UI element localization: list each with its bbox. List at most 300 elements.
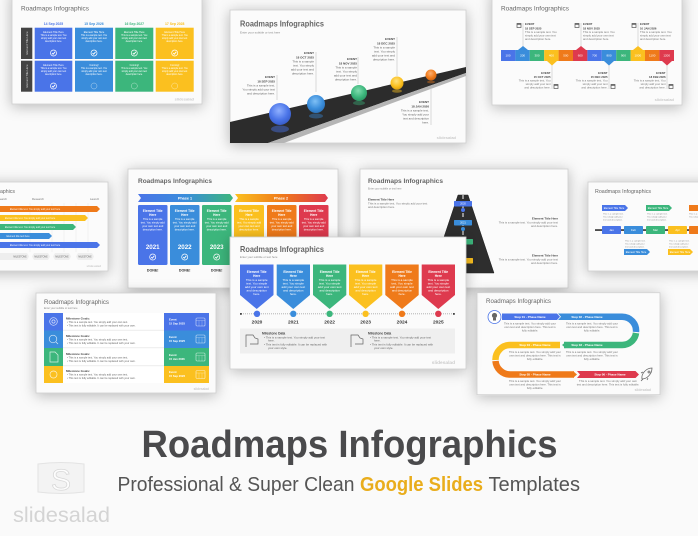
done labels: DONE!: [147, 268, 158, 272]
event labels: 18 SEP 2025: [257, 80, 275, 84]
phase cards: Element Title: [175, 209, 195, 213]
milestone data panel: • This is a sample text. You simply add your text: [370, 336, 431, 340]
event labels: 15 DEC 2025: [591, 75, 608, 79]
phase cards: text. You simply add: [205, 220, 229, 224]
event labels: description here.: [373, 58, 395, 62]
event labels: [242, 37, 429, 124]
date column: Event: [169, 370, 177, 374]
pentagon cards: Here: [290, 274, 297, 278]
milestone text: • This text is fully editable. It can be replaced with your own.: [67, 341, 136, 345]
phase arrows: Phase 1: [178, 196, 192, 200]
event labels: This is a sample: [292, 60, 314, 64]
panel: center-left slide, phase cards: [128, 169, 338, 288]
descriptions: You simply add your: [603, 216, 623, 218]
segmented bar: 800: [606, 54, 612, 58]
subtitle: Professional & Super Clean: [118, 474, 354, 496]
pentagon cards: Here: [253, 274, 260, 278]
phase cards: Here: [310, 213, 317, 217]
footer brand: slidesalad: [437, 135, 457, 140]
milestone chips: MILESTONE: [13, 256, 27, 258]
event labels: EVENT: [541, 71, 551, 75]
card grid: description here.: [45, 73, 62, 76]
date column: Event: [169, 318, 177, 322]
phase cards: This is a sample: [239, 217, 259, 221]
step descriptions: This is a sample text. You simply add your: [509, 350, 561, 354]
pentagon cards: text. You simple: [283, 282, 304, 286]
panel: lower-right slide, winding road steps: [477, 293, 660, 395]
year labels: 2024: [397, 320, 408, 326]
pentagon cards: This is a sample: [427, 278, 449, 282]
pentagon cards: text. You simple: [246, 282, 268, 286]
gantt arrows: Element title text. You simply add your text here: [10, 244, 61, 247]
card grid: simply add your own text: [122, 70, 147, 73]
step descriptions: own text and description here. This text is: [509, 354, 561, 358]
step descriptions: This is a sample text. You simply add your: [566, 350, 618, 354]
phase cards: text. You simply add: [302, 220, 326, 224]
event labels: This is a sample text. You: [634, 78, 666, 82]
event labels: This is a sample text. You: [583, 30, 615, 34]
step descriptions: fully editable.: [522, 328, 538, 332]
descriptions: You simply add your: [669, 242, 689, 246]
event labels: EVENT: [347, 57, 357, 61]
element text blocks: and description here.: [368, 205, 395, 209]
step labels: [514, 315, 626, 376]
pentagon cards: add your own text: [390, 285, 414, 289]
milestone data panel: • This is a sample text. You simply add your text: [264, 336, 325, 340]
card grid: simply add your own text: [162, 70, 188, 73]
step labels: Step 01 - Phase Name: [514, 315, 546, 319]
pentagon cards: Element Title: [392, 270, 412, 274]
step descriptions: fully editable.: [584, 357, 600, 361]
gantt arrows: Element title text. You simply add your text here: [5, 226, 56, 229]
event labels: EVENT: [304, 51, 314, 55]
event labels: text. You simply: [374, 50, 395, 54]
slide heading: Roadmaps Infographics: [240, 245, 324, 254]
done labels: DONE!: [179, 268, 190, 272]
phase cards: [138, 205, 328, 265]
phase cards: description here.: [239, 228, 259, 232]
card grid: simply add your own text: [41, 70, 66, 73]
card grid: Coming!: [170, 64, 180, 67]
panel: lower-left slide, milestone table: Enter your subtitle or text here: [44, 307, 78, 310]
step descriptions: text and description here. This text is fully editable.: [577, 382, 640, 386]
pentagon cards: Element Title: [247, 270, 267, 274]
pentagon cards: text. You simple: [391, 282, 413, 286]
row labels: Element Title Here: [25, 64, 29, 88]
start icon: [488, 310, 501, 324]
event labels: EVENT: [385, 37, 395, 41]
phase cards: Element Title: [239, 209, 259, 213]
pentagon cards: here.: [253, 292, 260, 296]
slide heading: Roadmaps Infographics: [21, 6, 90, 12]
subtitle: Google Slides: [360, 474, 483, 496]
descriptions: This is a sample text.: [625, 240, 646, 242]
panel: center-right slide, perspective road: [360, 169, 568, 288]
date column: 15 Sep 2025: [169, 339, 185, 343]
card grid: Element Title Here: [84, 31, 105, 34]
card grid: Element Title Here: [164, 31, 186, 34]
phase cards: text. You simply add: [270, 220, 294, 224]
milestone data panel: Milestone Data: [262, 332, 285, 336]
event labels: You simply add your: [402, 112, 429, 116]
gantt arrows: Element title text. You simply add your text here: [5, 217, 56, 220]
date headers: [44, 22, 185, 26]
pentagon cards: Element Title: [283, 270, 303, 274]
step descriptions: fully editable.: [527, 357, 543, 361]
pentagon cards: and description: [355, 288, 376, 292]
panel: center front slide, pentagon timeline: [230, 237, 466, 369]
step labels: Step 05 - Phase Name: [519, 372, 551, 376]
pentagon cards: add your own text: [281, 285, 305, 289]
event labels: [519, 22, 672, 90]
phase cards: your own text and: [303, 224, 325, 228]
event labels: description here.: [335, 78, 357, 82]
pentagon cards: here.: [326, 292, 333, 296]
milestone chips: MILESTONE: [78, 256, 92, 258]
event labels: This is a sample text.: [247, 84, 275, 88]
pennant labels: Element Title Here: [648, 207, 669, 210]
event labels: and description here.: [525, 37, 551, 41]
pentagon cards: and description: [247, 288, 267, 292]
step descriptions: own text and description here. This text is: [509, 382, 561, 386]
phase cards: Here: [278, 213, 285, 217]
date column: 15 Sep 2025: [169, 322, 185, 326]
event labels: This is a sample text. You: [640, 30, 672, 34]
card grid: This is a sample text. You: [81, 34, 108, 37]
phase arrows: [138, 194, 328, 202]
milestone headers: Research: [32, 197, 44, 201]
phase cards: Element Title: [304, 209, 324, 213]
segmented bar: 900: [621, 54, 626, 58]
milestone data panel: here.: [268, 338, 275, 342]
done labels: DONE!: [211, 268, 222, 272]
phase cards: description here.: [272, 228, 292, 232]
pentagon cards: This is a sample: [391, 278, 413, 282]
pentagon cards: Here: [435, 274, 442, 278]
descriptions: You simply add your: [647, 216, 667, 218]
card grid: description here.: [45, 40, 62, 43]
step labels: Step 02 - Phase Name: [571, 315, 603, 319]
event labels: and description here.: [639, 86, 666, 90]
logo: slidesalad: slidesalad: [13, 504, 110, 527]
date headers: 15 Sep 2026: [84, 22, 104, 26]
logo: slidesalad: [13, 462, 110, 527]
phase cards: Element Title: [143, 209, 163, 213]
event labels: EVENT: [525, 22, 535, 26]
event labels: 10 JAN 2026: [640, 26, 657, 30]
footer brand: slidesalad: [86, 264, 101, 268]
slide heading: Roadmaps Infographics: [44, 300, 109, 306]
subtitle: [118, 474, 580, 496]
panel: top-left slide, quarterly card grid: [12, 0, 202, 104]
event labels: This is a sample text. You: [519, 78, 551, 82]
done labels: [147, 268, 222, 272]
event labels: EVENT: [656, 71, 666, 75]
event labels: This is a sample text. You: [525, 30, 557, 34]
year labels: 2021: [288, 320, 299, 326]
step descriptions: This is a sample text. You simply add your: [566, 322, 618, 326]
phase cards: 2021: [146, 244, 160, 251]
footer brand: slidesalad: [432, 360, 455, 366]
event labels: and description here.: [247, 92, 275, 96]
phase cards: description here.: [304, 228, 324, 232]
event labels: EVENT: [583, 22, 593, 26]
card grid: Element Title Here: [43, 31, 64, 34]
icon column: [44, 313, 63, 383]
month boxes: Apr: [675, 228, 680, 232]
card grid: This is a sample text. You: [121, 34, 148, 37]
pentagon cards: add your own text: [426, 285, 450, 289]
card grid: simply add your own text: [81, 37, 107, 40]
milestone text: • This is a sample text. You simply add your own text.: [67, 338, 128, 342]
event labels: and description here.: [581, 86, 608, 90]
phase cards: This is a sample: [304, 217, 324, 221]
segmented bar: 600: [578, 54, 583, 58]
descriptions: You simply add your: [625, 242, 645, 246]
event labels: 18 FEB 2026: [649, 75, 666, 79]
slide heading: Roadmaps Infographics: [138, 178, 212, 185]
card grid: simply add your own text: [41, 37, 66, 40]
phase cards: your own text and: [271, 224, 293, 228]
card grid: This is a sample text. You: [81, 67, 108, 70]
pennant labels: Element Title Here: [604, 207, 625, 210]
phase cards: your own text and: [174, 224, 196, 228]
phase cards: 2022: [178, 244, 192, 251]
logo: slidesalad: S: [51, 464, 71, 497]
card grid: description here.: [86, 40, 103, 43]
pentagon cards: add your own text: [354, 285, 378, 289]
descriptions: text and description.: [603, 218, 623, 222]
phase cards: your own text and: [206, 224, 228, 228]
step descriptions: This is a sample text. You simply add your: [509, 379, 561, 383]
phase cards: Here: [245, 213, 253, 217]
pentagon cards: text. You simple: [319, 282, 340, 286]
event labels: This is a sample: [335, 66, 357, 70]
slide heading: Roadmaps Infographics: [486, 299, 551, 305]
step labels: Step 04 - Phase Name: [519, 343, 551, 347]
slide heading: Roadmaps Infographics: [240, 20, 324, 28]
event labels: 18 SEP 2025: [525, 26, 542, 30]
milestone data panel: your own style.: [374, 346, 393, 350]
pentagon cards: and description: [283, 288, 304, 292]
markers and leaders: [517, 23, 673, 89]
pentagon cards: and description: [428, 288, 449, 292]
main title: Roadmaps Infographics: [142, 424, 558, 466]
pentagon cards: This is a sample: [355, 278, 377, 282]
milestone text: • This is a sample text. You simply add your own text.: [67, 372, 128, 376]
event labels: add your text and: [291, 68, 314, 72]
pentagon cards: here.: [399, 292, 406, 296]
step descriptions: fully editable.: [584, 328, 600, 332]
milestone text: [66, 316, 136, 380]
card grid: description here.: [166, 73, 184, 76]
timeline line: [595, 229, 698, 231]
card grid: description here.: [126, 40, 143, 43]
event labels: add your text and: [372, 54, 395, 58]
pentagon cards: here.: [290, 292, 297, 296]
phase cards: text. You simply add: [141, 220, 165, 224]
pentagon cards: This is a sample: [319, 278, 341, 282]
card grid: This is a sample text. You: [162, 34, 188, 37]
pentagon cards: here.: [362, 292, 369, 296]
icon: rocket: [641, 368, 652, 381]
date column: [164, 313, 209, 383]
phase cards: description here.: [207, 228, 227, 232]
date column: 15 Jan 2026: [169, 357, 185, 361]
segmented bar: 700: [592, 54, 597, 58]
milestone data panel: Milestone Data: [368, 332, 391, 336]
event labels: simply add your own text: [583, 34, 614, 38]
step descriptions: own text and description here. This text is: [504, 325, 556, 329]
slide heading: Roadmaps Infographics: [368, 178, 443, 185]
winding arrows: [495, 314, 639, 378]
event labels: simply add your text: [583, 82, 608, 86]
milestone text: • This text is fully editable. It can be replaced with your own.: [67, 359, 136, 363]
segmented bar: 1100: [649, 54, 656, 58]
month boxes: Feb: [631, 228, 636, 232]
footer brand: slidesalad: [175, 96, 195, 102]
road: 2021: [460, 221, 466, 225]
phase cards: This is a sample: [175, 217, 195, 221]
event labels: 15 OCT 2025: [534, 75, 551, 79]
card grid: simply add your own text: [81, 70, 107, 73]
phase cards: Element Title: [207, 209, 227, 213]
subtitle: Templates: [488, 474, 580, 496]
pentagon cards: This is a sample: [282, 278, 304, 282]
pentagon cards: Element Title: [320, 270, 340, 274]
slide heading: Roadmaps Infographics: [501, 6, 570, 12]
panel: top-right slide, colored year bar timeline: [492, 0, 682, 105]
card grid: simply add your own text: [122, 37, 147, 40]
road: [230, 67, 466, 143]
element text blocks: Element Title Here: [532, 254, 558, 258]
segmented bar: 100: [505, 54, 511, 58]
row labels: [21, 28, 32, 92]
milestone data panel: here.: [374, 338, 381, 342]
event leader lines: [277, 37, 431, 125]
date column: 15 Sep 2026: [169, 374, 185, 378]
event labels: simply add your own text: [525, 34, 556, 38]
milestone text: Milestone Goals:: [66, 352, 90, 356]
card grid: Coming!: [89, 64, 99, 67]
timeline: [240, 311, 455, 317]
event labels: and description here.: [583, 37, 609, 41]
phase cards: text. You simply add: [173, 220, 197, 224]
event labels: simply add your text: [526, 82, 551, 86]
date column: Event: [169, 353, 177, 357]
pentagon cards: and description: [319, 288, 340, 292]
pentagon cards: Here: [326, 274, 333, 278]
footer brand: slidesalad: [194, 387, 209, 391]
element text blocks: Element Title Here: [532, 216, 558, 220]
road: 2020: [460, 202, 466, 206]
road: [432, 195, 494, 273]
gantt arrows: [0, 206, 100, 248]
row labels: Element Title Here: [25, 31, 29, 55]
milestone data panel: • This text is fully editable. It can be replaced with: [264, 342, 327, 346]
event labels: EVENT: [598, 71, 608, 75]
event labels: and description here.: [640, 37, 666, 41]
date headers: 16 Sep 2027: [125, 22, 144, 26]
descriptions: text and description.: [647, 218, 667, 222]
card grid: [35, 28, 194, 92]
element text blocks: This is a sample text. You simply add your text: [368, 202, 427, 206]
milestone headers: [0, 197, 100, 201]
panel: lower-left slide, milestone table: [36, 293, 216, 393]
event labels: simply add your text: [641, 82, 666, 86]
panel: left slide, gantt arrows: [0, 182, 108, 271]
event labels: 18 DEC 2025: [377, 42, 395, 46]
event labels: 18 JAN 2026: [411, 104, 429, 108]
pennant labels: [602, 205, 698, 255]
milestone chips: [0, 253, 94, 260]
pentagon cards: Element Title: [428, 270, 448, 274]
card grid: Element Title Here: [43, 64, 64, 67]
milestone text: Milestone Goals:: [66, 369, 90, 373]
event labels: text. You simply: [293, 64, 314, 68]
phase cards: text. You simply add: [237, 220, 261, 224]
segmented bar: 500: [563, 54, 569, 58]
event labels: This is a sample text.: [401, 108, 429, 112]
milestone chips: MILESTONE: [55, 256, 69, 258]
card grid: description here.: [126, 73, 143, 76]
pentagon cards: and description: [392, 288, 412, 292]
milestone text: Milestone Goals:: [66, 334, 90, 338]
element text blocks: and description here.: [531, 224, 558, 228]
year labels: 2020: [252, 320, 263, 326]
pentagon cards: Here: [362, 274, 369, 278]
pennant labels: Element Title Here: [626, 251, 647, 254]
step descriptions: [504, 322, 640, 390]
descriptions: This is a sample text.: [647, 212, 668, 216]
pentagon cards: text. You simple: [355, 282, 376, 286]
phase cards: Element Title: [272, 209, 292, 213]
footer brand: slidesalad: [635, 388, 651, 392]
milestone text: • This is a sample text. You simply add your own text.: [67, 356, 128, 360]
milestone data panel: your own style.: [268, 346, 287, 350]
milestone chips: MILESTONE: [34, 256, 48, 258]
descriptions: text and description.: [669, 246, 689, 248]
footer brand: slidesalad: [655, 97, 675, 102]
phase cards: This is a sample: [143, 217, 163, 221]
card grid: description here.: [166, 40, 184, 43]
descriptions: This is a sample text.: [669, 240, 690, 242]
element text blocks: [368, 198, 558, 265]
panel: far-right slide, horizontal milestones: [588, 182, 698, 271]
element text blocks: Element Title Here: [368, 198, 394, 202]
card grid: This is a sample text. You: [40, 34, 67, 37]
step descriptions: own text and description here. This text is: [566, 325, 618, 329]
event labels: EVENT: [265, 75, 275, 79]
event labels: This is a sample text. You: [576, 78, 608, 82]
glass balls: [269, 70, 436, 132]
element text blocks: This is a sample text. You simply add your text: [499, 258, 558, 262]
milestone data panel: • This text is fully editable. It can be replaced with: [370, 342, 433, 346]
event labels: here.: [422, 120, 429, 124]
event labels: 18 NOV 2025: [583, 26, 600, 30]
step descriptions: own text and description here. This text is: [566, 354, 618, 358]
event labels: and description here.: [524, 86, 551, 90]
month boxes: Mar: [653, 228, 658, 232]
step labels: Step 06 - Phase Name: [594, 372, 626, 376]
descriptions: This is a sample text.: [603, 212, 624, 216]
grid lines: [30, 203, 88, 252]
phase cards: Here: [149, 213, 156, 217]
card grid: description here.: [86, 73, 103, 76]
phase arrows: Phase 2: [274, 196, 288, 200]
step labels: Step 03 - Phase Name: [571, 343, 603, 347]
step descriptions: This is a sample text. You simply add your: [504, 322, 556, 326]
